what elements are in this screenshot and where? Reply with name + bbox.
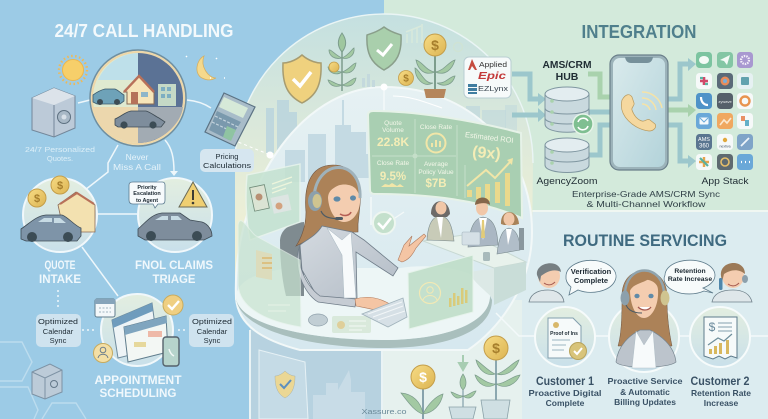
connecting line [496, 313, 768, 336]
text: appointment scheduling: APPOINTMENT [94, 373, 182, 387]
text: FNOL claims triage [135, 258, 213, 286]
label: optimized calendar sync left: Sync [50, 336, 67, 345]
speech bubble: retention rate increase: Retention [674, 268, 706, 275]
logo card: Applied Epic and EZLynx [464, 57, 511, 98]
holographic panel: profile cards [246, 164, 300, 240]
icon: gold shield [283, 55, 321, 103]
speech bubble: retention rate increase [664, 260, 715, 294]
heading: 24/7 CALL HANDLING [54, 21, 234, 41]
label: app stack: App Stack [702, 176, 749, 187]
app stack icon grid [696, 52, 753, 170]
text: personalized quotes: Quotes. [47, 154, 73, 163]
white shirt [327, 228, 356, 298]
label: pricing calculations: Pricing [216, 152, 238, 161]
hand gesture [398, 234, 426, 262]
service circle: proof of insurance [535, 307, 595, 367]
icon: small chart [362, 74, 375, 87]
speech bubble: verification complete [566, 260, 616, 295]
central circular desk [236, 266, 492, 348]
metric: close rate ring [420, 124, 452, 152]
text: proactive service: Billing Updates [614, 397, 676, 407]
icon: house [124, 76, 154, 104]
text: customer 1: Proactive Digital [528, 388, 602, 398]
service circle: billing report [690, 307, 750, 367]
skyline: inside dome [285, 100, 370, 184]
label: optimized calendar sync left [36, 314, 81, 347]
text: quote intake: INTAKE [39, 272, 81, 286]
metric: quote volume: 22.8K [377, 135, 409, 149]
hair back [296, 165, 360, 246]
colleague: woman right [497, 212, 524, 254]
metric: close rate ring: Close Rate [420, 124, 452, 131]
status check badge [373, 212, 404, 234]
icon: damaged car [115, 111, 165, 127]
text: appointment scheduling [94, 373, 182, 400]
app stack icon grid: zywave [718, 99, 732, 104]
metric: average policy value: $7B [425, 178, 447, 190]
text: quote intake [39, 258, 81, 286]
text: FNOL claims triage: TRIAGE [152, 272, 196, 286]
node: appointment scheduling [94, 294, 183, 366]
label: optimized calendar sync left: Calendar [43, 327, 74, 336]
meeting table and colleagues [423, 198, 526, 305]
metric: quote volume: Quote [384, 120, 402, 127]
text: customer 2: Customer 2 [690, 376, 750, 388]
service circle: billing report: $ [709, 320, 716, 334]
agent: main woman [296, 165, 426, 314]
text: customer 1: Complete [546, 398, 585, 408]
chair [280, 222, 304, 296]
colleague: man centre [462, 198, 498, 247]
text: personalized quotes [25, 145, 95, 163]
jacket [300, 226, 398, 298]
label: priority escalation: Priority [137, 185, 158, 191]
text: proactive service [608, 376, 683, 407]
label: AgencyZoom: AgencyZoom [536, 176, 598, 187]
icon: phone [163, 337, 179, 366]
metric: average policy value [418, 161, 454, 190]
label: optimized calendar sync right: Calendar [197, 327, 228, 336]
icon: sun [59, 56, 87, 84]
face [328, 184, 360, 222]
label: optimized calendar sync right: Sync [204, 336, 221, 345]
icon: database AgencyZoom [545, 138, 589, 172]
label: optimized calendar sync right [189, 314, 234, 347]
logo card: Applied Epic and EZLynx: Epic [478, 71, 507, 82]
metric: close rate percent: Close Rate [377, 160, 409, 167]
panel: routine servicing [496, 231, 768, 408]
app stack icon grid: AMS [698, 137, 710, 143]
skyline: left [266, 100, 517, 155]
customer 2 avatar on phone [712, 263, 752, 302]
label: optimized calendar sync right: Optimized [192, 317, 232, 326]
customer 1 avatar [529, 263, 564, 302]
text: proactive service: Proactive Service [608, 376, 683, 386]
text: proactive service: & Automatic [620, 387, 670, 397]
metric: estimated ROI chart: Estimated ROI [465, 130, 514, 145]
icon: coins: $ [34, 193, 40, 205]
speech bubble: retention rate increase: Rate Increase [668, 276, 712, 283]
metric: close rate percent: 9.5% [380, 171, 406, 183]
logo card: Applied Epic and EZLynx: EZLynx [478, 84, 508, 93]
label: priority escalation: Escalation [133, 191, 161, 197]
icon: coins: $ [57, 180, 63, 192]
icon: person badge [94, 344, 112, 362]
icon: smartphone with call [610, 55, 668, 170]
icon: safe [32, 88, 75, 137]
watermark: Xassure.co [362, 407, 406, 416]
icon: small safe [32, 364, 62, 399]
icon: calendar back [112, 303, 158, 358]
holographic panel: curved left [238, 221, 301, 327]
node: quote intake [21, 176, 97, 252]
mouse [308, 314, 328, 326]
icon: tall coin plant pot [475, 336, 520, 419]
hand on keyboard [355, 297, 393, 314]
text: customer 1: Customer 1 [536, 376, 595, 388]
service agent portrait [609, 270, 679, 372]
label: pricing calculations: Calculations [203, 161, 251, 170]
meeting table [470, 268, 494, 300]
text: integration summary: Enterprise-Grade AMS/CRM Sync [572, 189, 721, 199]
text: integration summary [572, 189, 721, 209]
flow arrows [512, 64, 690, 161]
speech bubble: verification complete: Complete [574, 276, 608, 285]
icon: check badge [163, 295, 183, 315]
holographic monitor [408, 255, 473, 329]
text: customer 1 [528, 376, 602, 408]
heading: INTEGRATION [582, 22, 696, 42]
metric: estimated ROI chart: (9x) [471, 144, 501, 163]
icon: faint growth chart [406, 24, 422, 43]
label: priority escalation [129, 182, 165, 208]
text: appointment scheduling: SCHEDULING [100, 386, 176, 400]
note card [332, 316, 371, 333]
icon: small calendar [95, 299, 115, 317]
icon: tall coin plant pot: $ [492, 340, 500, 356]
icon: coins [28, 176, 69, 207]
text: integration summary: & Multi-Channel Workflow [586, 199, 707, 209]
icon: calculator [205, 93, 255, 146]
icon: coin plant bottom: $ [419, 369, 427, 385]
panel: integration [512, 22, 753, 209]
icon: blue car [93, 89, 124, 104]
label: pricing calculations [200, 149, 254, 172]
keyboard [362, 298, 407, 327]
label: AMS/CRM hub: HUB [556, 71, 579, 83]
panel: central dome [233, 14, 533, 350]
headset [308, 167, 360, 220]
metric: average policy value: Policy Value [418, 169, 454, 176]
icon: money plant with pot: $ [431, 37, 439, 53]
service circle: proof of insurance: Proof of Ins [550, 331, 578, 337]
text: quote intake: QUOTE [44, 258, 76, 272]
label: AMS/CRM hub [542, 59, 592, 83]
icon: coin plant bottom [401, 365, 443, 419]
metric: quote volume: Volume [382, 127, 404, 134]
flow connectors [58, 100, 211, 330]
text: never miss a call: Never [126, 152, 148, 162]
app stack icon grid: nextiva [719, 144, 731, 148]
icon: seedling pot [449, 355, 476, 419]
decorative hexagon outlines [0, 342, 86, 419]
icon: growing plant [328, 33, 356, 91]
icon: day and night clock [90, 50, 186, 146]
metric: estimated ROI chart [465, 130, 514, 206]
text: customer 2: Increase [704, 398, 739, 408]
logo card: Applied Epic and EZLynx: Applied [479, 60, 507, 69]
text: never miss a call [113, 152, 161, 172]
node: FNOL claims triage [129, 178, 212, 252]
icon: small coin [398, 70, 414, 86]
panel: 24/7 call handling [21, 21, 255, 400]
metric: quote volume [377, 120, 409, 149]
panel: KPI dashboard [368, 111, 522, 218]
text: customer 2: Retention Rate [691, 388, 751, 398]
speech bubble: verification complete: Verification [571, 267, 612, 276]
text: FNOL claims triage: FNOL CLAIMS [135, 258, 213, 272]
text: personalized quotes: 24/7 Personalized [25, 145, 95, 154]
text: never miss a call: Miss A Call [113, 162, 161, 172]
app stack icon grid: 360 [699, 144, 710, 150]
icon: green shield [367, 27, 401, 70]
text: customer 2 [690, 376, 751, 408]
icon: moon and stars [186, 56, 225, 80]
icon: money plant with pot [415, 34, 462, 98]
lower city card with shield [259, 350, 365, 419]
label: optimized calendar sync left: Optimized [38, 317, 78, 326]
colleague: woman left [427, 201, 454, 241]
icon: small coin: $ [403, 74, 409, 84]
icon: calendar front [124, 316, 168, 362]
label: AMS/CRM hub: AMS/CRM [542, 59, 592, 71]
label: priority escalation: to Agent [136, 198, 158, 204]
metric: close rate percent [377, 160, 409, 187]
metric: average policy value: Average [424, 161, 448, 168]
icon: warning triangle [179, 182, 207, 207]
icon: database hub [545, 87, 593, 134]
heading: ROUTINE SERVICING [563, 231, 727, 250]
